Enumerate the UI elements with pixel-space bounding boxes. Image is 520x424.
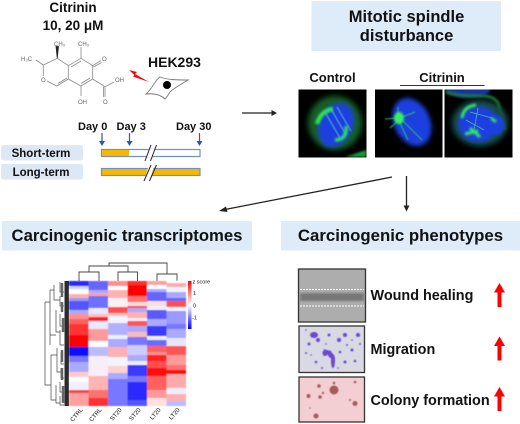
heading: Mitotic spindle disturbance: Mitotic spindle (349, 8, 464, 26)
label: Control: Control (309, 70, 356, 85)
arrow: to transcriptomes (219, 177, 392, 212)
label: Citrinin with bar (400, 70, 484, 86)
heatmap column labels (70, 407, 182, 423)
label: HEK293: HEK293 (148, 54, 201, 70)
icon: red up arrow colony formation (494, 387, 505, 411)
icon: HEK293 cell (146, 77, 188, 99)
label: Wound healing: Wound healing (370, 288, 473, 304)
heatmap column: ST20 1 (108, 281, 128, 406)
label: Migration: Migration (370, 342, 435, 358)
short-term bar (102, 145, 200, 161)
label: Long-term: Long-term (13, 167, 69, 179)
arrow: to spindle images (242, 110, 277, 116)
heatmap column: CTRL 2 (88, 281, 108, 406)
heatmap colour legend: 0 (193, 304, 196, 310)
heatmap colour legend: 1 (193, 291, 196, 297)
icon: citrinin chemical structure: OH (115, 78, 124, 84)
compound label: Citrinin 10, 20 µM (43, 0, 103, 33)
heatmap: top dendrogram (79, 263, 177, 281)
long-term bar (102, 165, 200, 181)
heatmap: cells (69, 281, 186, 406)
label: Long-term (1, 164, 83, 180)
icon: citrinin chemical structure: CH₃ (54, 42, 66, 48)
label: Colony formation: Colony formation (370, 393, 490, 409)
heading: Mitotic spindle disturbance (312, 1, 501, 51)
compound label: Citrinin 10, 20 µM: Citrinin (49, 0, 97, 15)
compound label: Citrinin 10, 20 µM: 10, 20 μM (43, 18, 103, 33)
heading: Carcinogenic transcriptomes: Carcinogenic transcriptomes (12, 226, 242, 245)
timeline day labels: Day 30 (176, 121, 211, 133)
label: Short-term: Short-term (12, 148, 70, 160)
icon: citrinin chemical structure: H₃C (21, 57, 33, 63)
arrow: to phenotypes (404, 176, 410, 212)
icon: citrinin chemical structure (21, 42, 124, 106)
heatmap column labels: CTRL (89, 407, 104, 423)
heading: Carcinogenic phenotypes (281, 221, 520, 250)
heatmap column labels: CTRL (70, 407, 85, 423)
micrograph: control (298, 90, 366, 158)
micrograph: citrinin 2 (444, 82, 512, 158)
heatmap column: LT20 2 (166, 281, 186, 406)
heading: Mitotic spindle disturbance: disturbance (360, 27, 453, 45)
micrograph: citrinin 1 (375, 90, 442, 158)
heatmap colour legend: z score (192, 280, 210, 286)
icon: citrinin chemical structure: O (103, 100, 108, 106)
heading: Carcinogenic transcriptomes (2, 221, 252, 250)
icon: citrinin chemical structure: O (41, 78, 46, 84)
label: Citrinin with bar: Citrinin (419, 70, 465, 85)
heatmap: left dendrogram (45, 282, 64, 405)
heading: Carcinogenic phenotypes: Carcinogenic phenotypes (298, 226, 503, 245)
icon: citrinin chemical structure: CH₃ (78, 42, 90, 48)
icon: citrinin chemical structure: O (102, 57, 107, 63)
image: wound healing (298, 269, 366, 322)
image: migration (299, 326, 364, 372)
heatmap column labels: LT20 (149, 407, 163, 421)
heatmap column: CTRL 1 (69, 281, 88, 406)
timeline day labels: Day 3 (116, 121, 146, 133)
label: Short-term (1, 145, 83, 160)
heatmap: leaf ticks (62, 281, 69, 406)
heatmap colour legend: -1 (192, 316, 197, 322)
timeline day labels (78, 121, 211, 133)
icon: red up arrow migration (494, 336, 505, 360)
heatmap colour legend (188, 280, 210, 329)
image: colony formation (299, 377, 364, 422)
heatmap column: ST20 2 (128, 281, 147, 406)
heatmap column labels: LT20 (168, 407, 182, 421)
icon: red lightning bolt (129, 70, 149, 82)
heatmap column labels: ST20 (129, 407, 143, 422)
icon: red up arrow wound healing (494, 283, 505, 307)
timeline day labels: Day 0 (78, 121, 107, 133)
heatmap column labels: ST20 (110, 407, 124, 422)
heatmap column: LT20 1 (147, 281, 166, 406)
timeline arrows (99, 133, 202, 146)
icon: citrinin chemical structure: OH (78, 100, 87, 106)
